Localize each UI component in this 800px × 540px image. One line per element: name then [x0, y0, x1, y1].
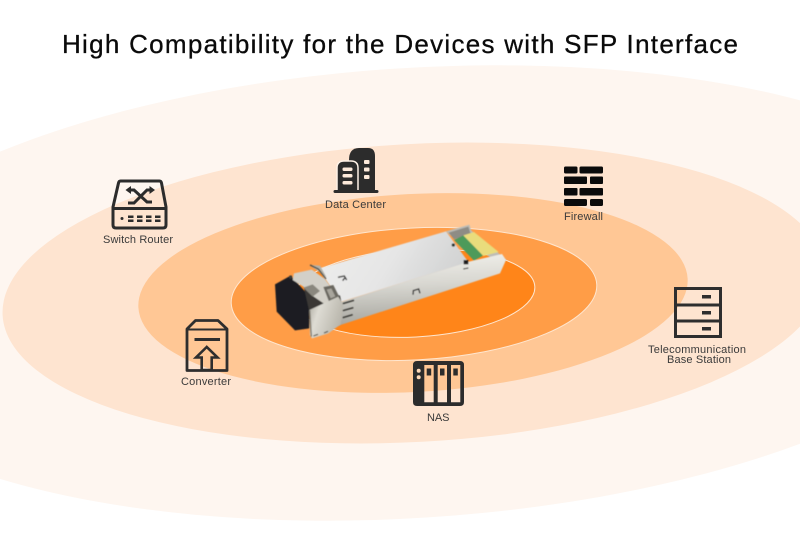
label: NAS: NAS	[427, 412, 450, 424]
front plate	[309, 297, 343, 338]
black connector block	[275, 276, 313, 330]
title: High Compatibility for the Devices with SFP Interface	[62, 29, 738, 59]
icon: firewall	[564, 166, 603, 206]
icon: switch router	[113, 181, 166, 228]
label: telecommunication base station: Base Station	[667, 354, 731, 366]
label: firewall: Firewall	[564, 211, 603, 223]
icon: data center	[334, 148, 378, 193]
latch	[293, 270, 338, 305]
icon: telecommunication base station	[675, 288, 721, 336]
circuit board	[454, 235, 483, 261]
icon: converter	[187, 320, 227, 370]
SFP transceiver module	[275, 225, 507, 338]
rear wall	[446, 225, 507, 263]
label: data center: Data Center	[325, 199, 386, 211]
top face	[318, 231, 468, 302]
label: telecommunication base station: Telecommunication	[648, 344, 746, 356]
icon: NAS	[413, 361, 464, 406]
side face	[337, 254, 506, 326]
vent slots	[343, 300, 354, 318]
label: telecommunication base station	[648, 344, 746, 366]
small markings	[452, 243, 455, 247]
label: converter: Converter	[181, 376, 231, 388]
dark backing behind latch	[303, 285, 342, 312]
label: switch router: Switch Router	[103, 234, 173, 246]
